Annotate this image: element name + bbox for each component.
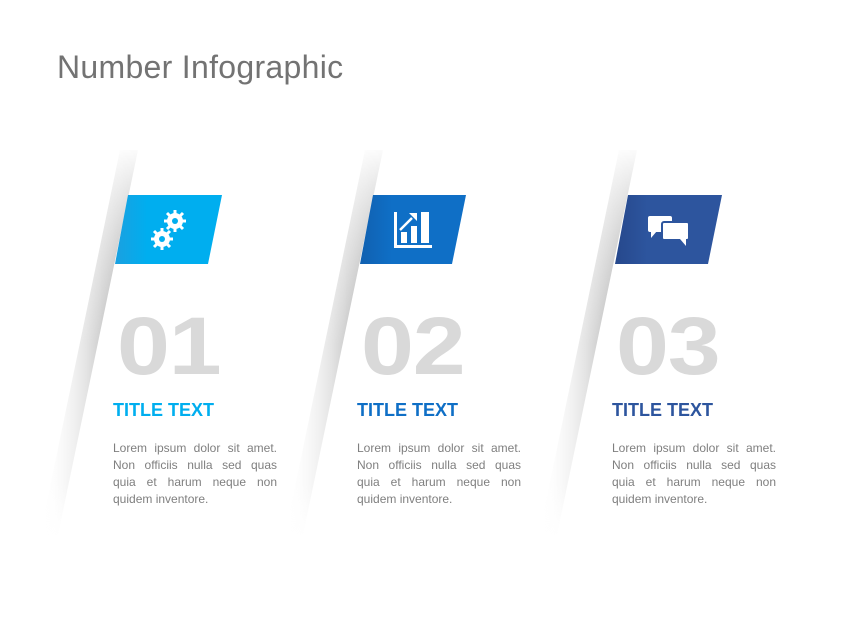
title: Number Infographic: [57, 49, 343, 85]
title text 2: TITLE TEXT: [357, 400, 458, 420]
number 01: 01: [117, 301, 220, 392]
icon: chart banner: [360, 195, 466, 264]
card 2: [357, 301, 521, 506]
card 3: [612, 301, 776, 506]
number 02: 02: [361, 301, 464, 392]
body text 3: Lorem ipsum dolor sit amet. Non officiis nulla sed quas quia et harum neque non quidem inventore.: [612, 441, 776, 506]
icon: gears banner: [115, 195, 222, 264]
number 03: 03: [616, 301, 719, 392]
title text 3: TITLE TEXT: [612, 400, 713, 420]
shapes: shadows and icon banners: [65, 158, 722, 491]
icon: chat banner: [615, 195, 722, 264]
body text 1: Lorem ipsum dolor sit amet. Non officiis nulla sed quas quia et harum neque non quidem inventore.: [113, 441, 277, 506]
card 1: [113, 301, 277, 506]
body text 2: Lorem ipsum dolor sit amet. Non officiis nulla sed quas quia et harum neque non quidem inventore.: [357, 441, 521, 506]
title text 1: TITLE TEXT: [113, 400, 214, 420]
